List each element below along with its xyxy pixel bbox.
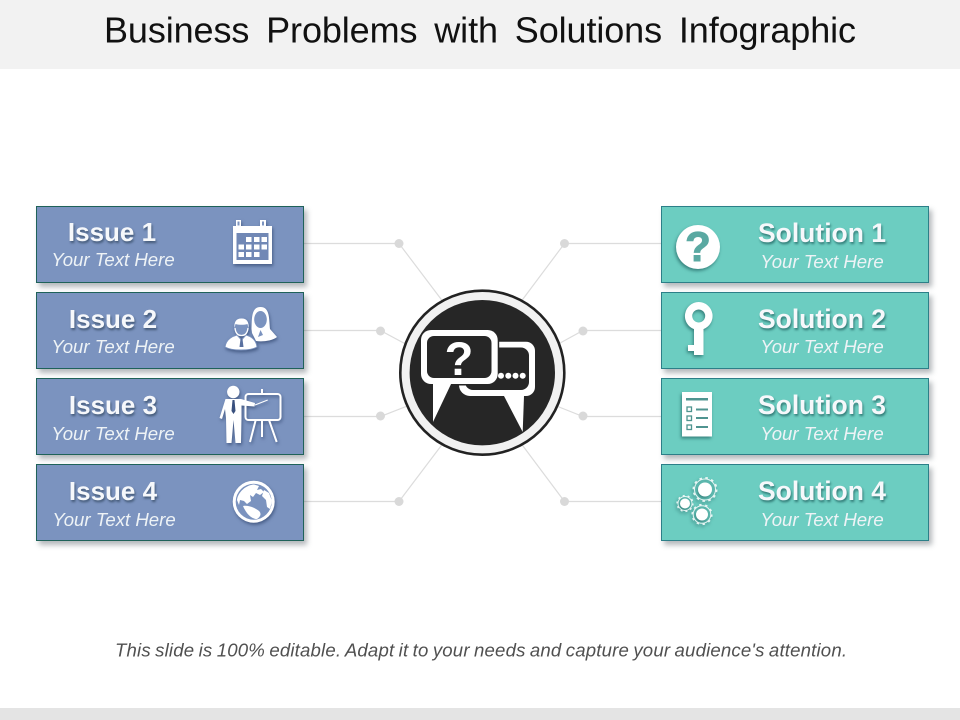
icon: gears — [674, 477, 718, 528]
icon: question bubble — [420, 328, 499, 422]
panel: Issue 4 — [36, 464, 304, 541]
heading: Solution 1: Solution 1 — [758, 218, 886, 248]
text: Issue 2 body: Your Text Here — [51, 336, 175, 357]
icon: ellipsis dots — [498, 373, 526, 379]
panel: Issue 3 — [36, 378, 304, 455]
text: Solution 3 body: Your Text Here — [760, 423, 884, 444]
footer note: This slide is 100% editable. Adapt it to your needs and capture your audience's attention. — [115, 640, 847, 660]
header band — [0, 0, 960, 69]
text: Issue 3 body: Your Text Here — [51, 423, 175, 444]
panel: Solution 2 — [661, 292, 929, 369]
heading: Solution 4: Solution 4 — [758, 476, 886, 506]
panel: Solution 3 — [661, 378, 929, 455]
panel: Issue 2 — [36, 292, 304, 369]
text: Solution 4 body: Your Text Here — [760, 509, 884, 530]
icon: question circle: ? — [685, 223, 711, 270]
panel: Issue 1 — [36, 206, 304, 283]
text: Issue 1 body: Your Text Here — [51, 249, 175, 270]
heading: Solution 3: Solution 3 — [758, 390, 886, 420]
icon: presenter at board — [220, 386, 284, 446]
bottom band — [0, 708, 960, 720]
title: Business Problems with Solutions Infographic — [104, 10, 856, 50]
icon: key — [682, 302, 714, 359]
heading: Solution 2: Solution 2 — [758, 304, 886, 334]
heading: Issue 1: Issue 1 — [68, 217, 156, 247]
central discussion emblem — [399, 289, 566, 456]
text: Issue 4 body: Your Text Here — [52, 509, 176, 530]
icon: two people — [224, 307, 278, 354]
icon: calendar — [232, 220, 274, 268]
icon: question circle — [673, 223, 721, 273]
panel: Solution 1 — [661, 206, 929, 283]
icon: question bubble: ? — [445, 332, 473, 385]
icon: globe — [232, 480, 278, 526]
icon: answer bubble — [459, 342, 535, 432]
heading: Issue 2: Issue 2 — [69, 304, 157, 334]
text: Solution 2 body: Your Text Here — [760, 336, 884, 357]
heading: Issue 4: Issue 4 — [69, 476, 157, 506]
text: Solution 1 body: Your Text Here — [760, 251, 884, 272]
heading: Issue 3: Issue 3 — [69, 390, 157, 420]
panel: Solution 4 — [661, 464, 929, 541]
icon: checklist — [679, 392, 713, 440]
